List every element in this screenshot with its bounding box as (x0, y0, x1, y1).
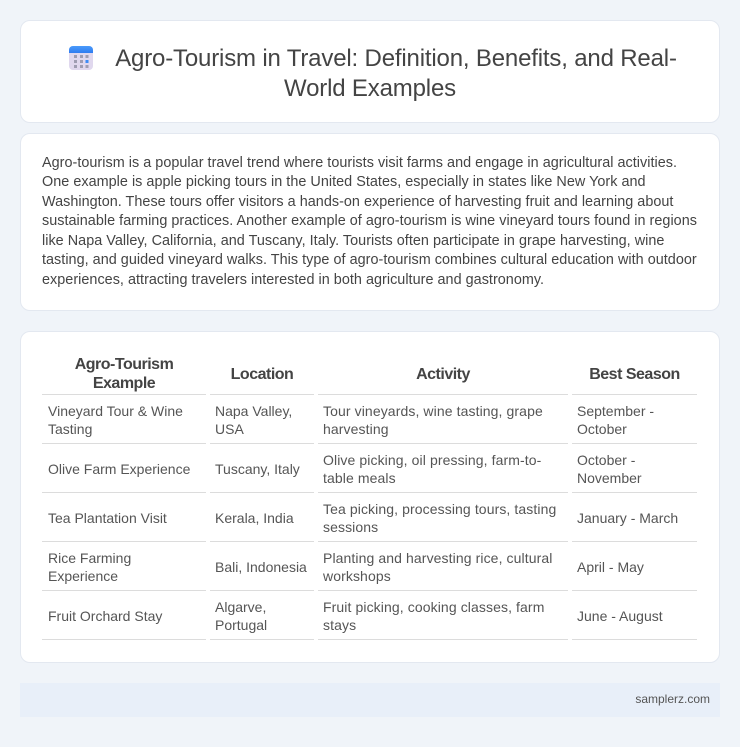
text block: description: Agro-tourism is a popular travel trend where tourists visit farms and engage in agricultural activities. (42, 155, 677, 171)
table row: rice (42, 550, 697, 591)
table row: fruit: Algarve, (215, 599, 266, 615)
table row: vineyard: USA (215, 421, 244, 437)
table row: olive (42, 452, 697, 493)
panel: description card (20, 133, 720, 311)
panel: title card (20, 20, 720, 123)
text block: description: One example is apple picking tours in the United States, especially in states like New York and (42, 174, 646, 190)
table row: vineyard: Tour vineyards, wine tasting, grape (323, 403, 543, 419)
table row: vineyard: Napa Valley, (215, 403, 292, 419)
table row: fruit: Fruit picking, cooking classes, farm (323, 599, 544, 615)
text block: description: Washington. These tours offer visitors a hands-on experience of harvesting fruit and learning about (42, 194, 673, 210)
table row: fruit (42, 599, 697, 640)
table row: fruit: stays (323, 617, 356, 633)
table row: olive: Olive Farm Experience (48, 461, 190, 477)
title (115, 45, 677, 102)
table row: rice: Bali, Indonesia (215, 559, 307, 575)
table row: vineyard: October (577, 421, 627, 437)
footer text: samplerz.com (635, 692, 710, 706)
table header: Agro-Tourism (75, 356, 173, 373)
table row: tea: January - March (577, 510, 678, 526)
text block: description: tasting, and guided vineyard walks. This type of agro-tourism combines cultural education with outdoor (42, 252, 697, 268)
icon: calendar (69, 46, 93, 70)
table row: tea: Kerala, India (215, 510, 294, 526)
table row: fruit: Fruit Orchard Stay (48, 608, 162, 624)
table header: Activity (416, 366, 470, 383)
title: Agro-Tourism in Travel: Definition, Benefits, and Real- (115, 45, 677, 72)
table row: rice: workshops (323, 568, 391, 584)
table row: fruit: June - August (577, 608, 663, 624)
table row: tea (42, 501, 697, 542)
table row: vineyard (42, 403, 697, 444)
text block: description (42, 155, 697, 288)
table row: rice: Experience (48, 568, 118, 584)
table row: tea: Tea Plantation Visit (48, 510, 167, 526)
table row: vineyard: Tasting (48, 421, 92, 437)
table header: Best Season (589, 366, 680, 383)
text block: description: sustainable farming practices. Another example of agro-tourism is wine vineyard tours found in regions (42, 213, 697, 229)
footer (20, 683, 720, 717)
table header (42, 356, 697, 395)
table row: rice: Planting and harvesting rice, cultural (323, 550, 552, 566)
table row: olive: Olive picking, oil pressing, farm-to- (323, 452, 541, 468)
table row: fruit: Portugal (215, 617, 267, 633)
table row: olive: table meals (323, 470, 396, 486)
table row: vineyard: harvesting (323, 421, 389, 437)
table row: tea: Tea picking, processing tours, tasting (323, 501, 556, 517)
title: World Examples (284, 75, 456, 102)
panel: table card (20, 331, 720, 663)
text block: description: experiences, attracting travelers interested in both agriculture and gastronomy. (42, 272, 544, 288)
table row: rice: Rice Farming (48, 550, 131, 566)
table row: vineyard: Vineyard Tour & Wine (48, 403, 183, 419)
table row: rice: April - May (577, 559, 644, 575)
table header: Location (231, 366, 293, 383)
table row: olive: October - (577, 452, 635, 468)
table row: tea: sessions (323, 519, 378, 535)
table row: vineyard: September - (577, 403, 654, 419)
table row: olive: Tuscany, Italy (215, 461, 300, 477)
table header: Example (93, 375, 155, 392)
text block: description: like Napa Valley, California, and Tuscany, Italy. Tourists often participate in grape harvesting, wine (42, 233, 664, 249)
table row: olive: November (577, 470, 642, 486)
